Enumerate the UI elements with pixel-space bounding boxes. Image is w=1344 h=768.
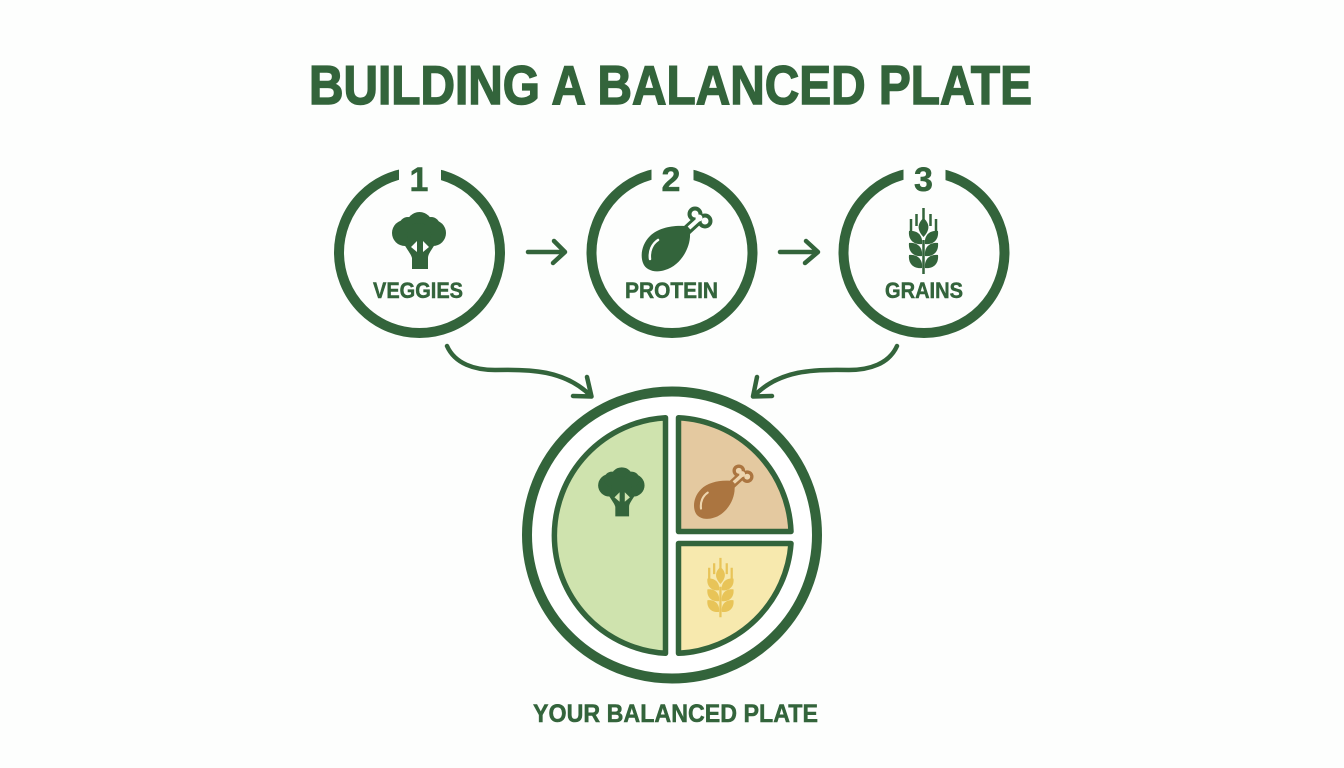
arrow: veggies to protein (528, 241, 565, 263)
plate icon: broccoli (598, 467, 645, 516)
label: veggies: VEGGIES (373, 278, 463, 303)
arrow: veggies to plate (447, 346, 592, 396)
plate section: protein quarter (678, 418, 791, 532)
ring 3 (844, 160, 1004, 333)
step 3: grains (844, 160, 1004, 333)
label: protein: PROTEIN (625, 278, 718, 303)
label: grains: GRAINS (885, 278, 963, 303)
plate section: veggies half (554, 418, 666, 653)
ring 1 (339, 160, 500, 333)
arrow: grains to plate (753, 346, 897, 396)
step 1: veggies (339, 160, 500, 333)
step 2: protein (592, 160, 752, 333)
plate caption: YOUR BALANCED PLATE (533, 700, 818, 728)
title: BUILDING A BALANCED PLATE (309, 54, 1032, 116)
plate section: grains quarter (678, 544, 791, 653)
ring 2 (592, 160, 752, 333)
number 2: 2 (662, 161, 680, 199)
plate icon: wheat (707, 558, 734, 617)
icon: broccoli (392, 212, 446, 269)
icon: chicken drumstick (642, 206, 712, 271)
number 3: 3 (914, 161, 933, 199)
plate rim (527, 392, 817, 678)
plate icon: chicken drumstick (694, 464, 754, 519)
balanced plate (527, 392, 817, 678)
icon: wheat (909, 208, 938, 274)
arrow: protein to grains (780, 241, 818, 263)
number 1: 1 (410, 161, 428, 199)
